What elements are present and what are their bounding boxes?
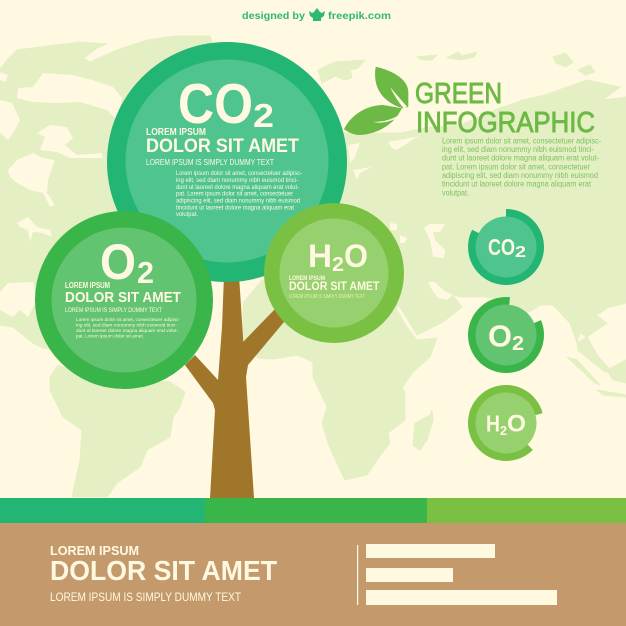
CO2 body text [176, 170, 302, 218]
H2O heading: DOLOR SIT AMET [289, 279, 380, 293]
O2 heading: LOREM IPSUM [65, 281, 110, 290]
world map background [0, 36, 626, 497]
icon: H2O badge: 2 [500, 423, 507, 438]
H2O formula: O [344, 238, 368, 274]
attribution: designed by freepik.com [242, 8, 391, 22]
H2O formula: H [308, 238, 332, 274]
icon: H2O badge: H [486, 410, 500, 436]
panel: H2O circle [264, 203, 404, 343]
intro text block: pat. Lorem ipsum dolor sit amet, consectetuer [442, 162, 590, 171]
icon: leaves [344, 67, 408, 135]
H2O heading: LOREM IPSUM [289, 275, 325, 282]
CO2 heading: LOREM IPSUM IS SIMPLY DUMMY TEXT [146, 157, 274, 167]
footer panel [0, 523, 626, 626]
intro text block: Lorem ipsum dolor sit amet, consectetuer adipisc- [442, 136, 601, 145]
CO2 body text: Lorem ipsum dolor sit amet, consectetuer adipisc- [176, 170, 302, 177]
icon: CO2 badge [472, 213, 540, 281]
icon: H2O badge [472, 389, 539, 457]
H2O heading: LOREM IPSUM IS SIMPLY DUMMY TEXT [289, 294, 366, 300]
footer heading text: LOREM IPSUM [50, 544, 139, 558]
O2 body text: ing elit, sed diam nonummy nibh euismod tinci- [76, 322, 177, 328]
intro text block [442, 136, 601, 197]
CO2 heading: DOLOR SIT AMET [146, 136, 299, 157]
intro text block: ing elit, sed diam nonummy nibh euismod tinci- [442, 145, 594, 154]
icon: O2 badge: O [488, 318, 512, 354]
O2 body text [76, 317, 180, 340]
O2 formula: 2 [137, 255, 154, 290]
O2 body text: Lorem ipsum dolor sit amet, consectetuer adipisc- [76, 317, 180, 323]
intro text block: dunt ut laoreet dolore magna aliquam erat volut- [442, 154, 599, 163]
CO2 body text: adipiscing elit, sed diam nonummy nibh euismod [176, 198, 300, 204]
panel: O2 circle [35, 211, 213, 389]
panel: CO2 circle [107, 42, 347, 282]
O2 heading: DOLOR SIT AMET [65, 289, 181, 306]
footer heading text [50, 544, 277, 604]
CO2 formula: CO [178, 72, 253, 136]
CO2 formula: 2 [253, 97, 274, 134]
CO2 body text: tincidunt ut laoreet dolore magna aliquam erat [176, 204, 294, 211]
O2 body text: pat. Lorem ipsum dolor sit amet. [76, 334, 144, 340]
icon: H2O badge: O [507, 410, 526, 438]
O2 heading: LOREM IPSUM IS SIMPLY DUMMY TEXT [65, 307, 162, 314]
intro text block: tincidunt ut laoreet dolore magna aliquam erat [442, 180, 592, 189]
CO2 body text: ing elit, sed diam nonummy nibh euismod tinci- [176, 177, 298, 184]
footer bars [357, 544, 557, 605]
O2 formula: O [100, 234, 136, 290]
intro text block: volutpat. [442, 188, 469, 197]
O2 body text: dunt ut laoreet dolore magna aliquam erat volut- [76, 328, 178, 334]
H2O formula [308, 238, 368, 276]
footer heading text: LOREM IPSUM IS SIMPLY DUMMY TEXT [50, 590, 242, 604]
CO2 body text: dunt ut laoreet dolore magna aliquam erat volut- [176, 184, 299, 191]
icon: CO2 badge: 2 [515, 244, 526, 261]
CO2 heading: LOREM IPSUM [146, 127, 206, 138]
icon: O2 badge [472, 301, 540, 369]
icon: CO2 badge: CO [488, 234, 515, 260]
intro text block: adipiscing elit, sed diam nonummy nibh euismod [442, 171, 598, 180]
H2O formula: 2 [332, 254, 344, 276]
footer heading text: DOLOR SIT AMET [50, 555, 277, 586]
title: INFOGRAPHIC [416, 107, 595, 139]
ground colour bands [0, 498, 626, 523]
CO2 body text: pat. Lorem ipsum dolor sit amet, consectetuer [176, 191, 293, 198]
attribution: designed by freepik.com: designed by [242, 10, 305, 22]
tree trunk and branches [185, 275, 284, 498]
icon: O2 badge: 2 [512, 333, 524, 355]
CO2 body text: volutpat. [176, 211, 198, 218]
CO2 heading [146, 127, 299, 167]
H2O heading [289, 275, 380, 300]
O2 heading [65, 281, 181, 314]
attribution: designed by freepik.com: freepik.com [328, 10, 391, 22]
title: GREEN [415, 78, 502, 110]
title [415, 78, 595, 139]
